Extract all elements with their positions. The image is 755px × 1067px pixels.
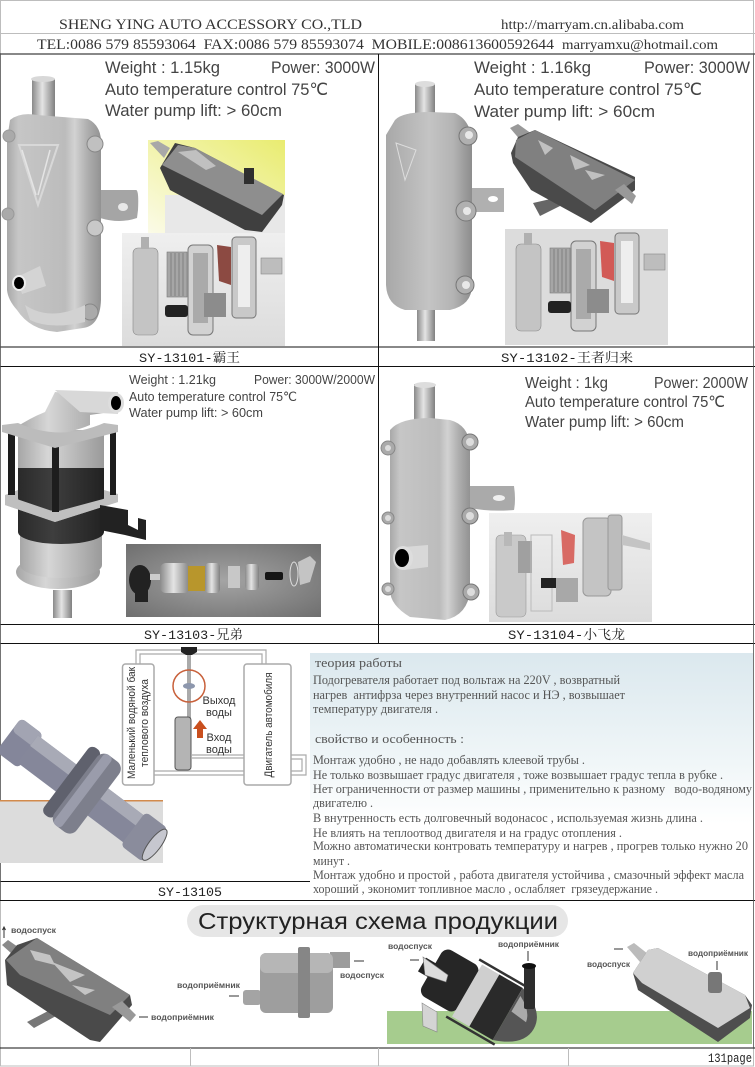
specs: SY-13101: Auto temperature control 75℃ (105, 80, 328, 99)
text block: features (313, 753, 753, 896)
tank box (122, 664, 154, 785)
text block: features: Не только возвышает градус двигателя , тоже возвышает градус тепла в рубке . (313, 768, 723, 782)
specs: SY-13103 (129, 372, 376, 420)
heater: main view (2, 76, 138, 332)
specs: SY-13104: Water pump lift: > 60cm (525, 414, 684, 431)
label and arrow: водоспуск (340, 971, 385, 980)
label and arrow (388, 942, 433, 960)
panel: SY-13104 (381, 375, 748, 622)
text block: features: Монтаж удобно и простой , работа двигателя устойчива , смазочный эффект масла (313, 868, 744, 882)
label and arrow (177, 981, 241, 996)
tank label line two: теплового воздуха (139, 678, 151, 767)
compact heater (243, 947, 350, 1018)
specs: SY-13101 (105, 58, 375, 120)
label and arrow (587, 949, 631, 969)
caption: SY-13101: SY-13101-霸王 (139, 351, 240, 366)
specs: SY-13101: Water pump lift: > 60cm (105, 101, 282, 120)
specs: SY-13104 (525, 375, 748, 431)
specs: SY-13102 (474, 58, 750, 121)
label and arrow: водоспуск (388, 942, 433, 951)
label and arrow (688, 949, 749, 970)
text block: features: хороший , экономит топливное масло , ослабляет грязеудержание . (313, 882, 658, 896)
header: company name: SHENG YING AUTO ACCESSORY CO.,TLD (59, 17, 362, 33)
photo: exploded view (489, 513, 652, 622)
silver heater (627, 943, 752, 1042)
caption: SY-13102: SY-13102-王者归来 (501, 350, 633, 366)
panel: SY-13103 (2, 372, 376, 618)
text block: features: В внутренность есть долговечный водонасос , используемая жизнь длина . (313, 811, 703, 825)
caption: SY-13105: SY-13105 (158, 885, 222, 900)
arrow (193, 720, 207, 738)
label and arrow (498, 940, 560, 961)
photo: exploded view (122, 233, 285, 346)
text block: theory (313, 673, 626, 716)
header: phone numbers: TEL:0086 579 85593064 FAX:0086 579 85593074 MOBILE:008613600592644 (37, 37, 555, 53)
text block: theory: температуру двигателя . (313, 702, 438, 716)
heading pill (187, 905, 568, 937)
specs: SY-13101: Power: 3000W (271, 58, 375, 77)
specs: SY-13103: Weight : 1.21kg (129, 372, 216, 387)
specs: SY-13104: Auto temperature control 75℃ (525, 394, 725, 411)
label and arrow: водоприёмник (498, 940, 560, 949)
caption: SY-13104: SY-13104-小飞龙 (508, 627, 625, 643)
small heater (175, 717, 191, 770)
water outlet label: воды (206, 707, 232, 719)
label and arrow: водоспуск (587, 960, 631, 969)
panel: product structure (2, 905, 752, 1058)
text block: theory: нагрев антифрза через внутренний насос и НЭ , возвышает (313, 688, 626, 702)
text block: theory: Подогревателя работает под вольтаж на 220V , возвратный (313, 673, 620, 687)
diagram: water circuit (122, 647, 306, 785)
engine label: Двигатель автомобиля (263, 672, 275, 778)
label and arrow: водоприёмник (151, 1013, 215, 1022)
water inlet label (206, 732, 232, 756)
text block: features: Нет ограниченности от размер машины , применительно к разному водо-водяному (313, 782, 753, 796)
highlight circle (173, 670, 205, 702)
water outlet label (203, 695, 236, 719)
panel: working theory text (310, 653, 753, 897)
water inlet label: Вход (207, 732, 232, 744)
heater: main view (381, 382, 515, 620)
panel: SY-13105 (0, 647, 306, 884)
pump: main view (2, 390, 146, 618)
specs: SY-13102: Water pump lift: > 60cm (474, 102, 655, 121)
header: email: marryamxu@hotmail.com (562, 38, 718, 53)
cap knob (181, 647, 197, 655)
heater: main view (386, 81, 504, 341)
specs: SY-13103: Auto temperature control 75℃ (129, 389, 297, 404)
label and arrow: водоприёмник (177, 981, 241, 990)
specs: SY-13103: Water pump lift: > 60cm (129, 405, 263, 420)
black pump (405, 936, 550, 1058)
photo: exploded view (505, 229, 668, 345)
specs: SY-13103: Power: 3000W/2000W (254, 372, 376, 387)
heading: features: свойство и особенность : (315, 732, 464, 746)
label and arrow: водоспуск (11, 926, 57, 935)
header: website: http://marryam.cn.alibaba.com (501, 18, 684, 33)
heater A (2, 938, 136, 1042)
photo: heater dark view (510, 124, 636, 223)
text block: features: минут . (313, 854, 350, 868)
specs: SY-13102: Auto temperature control 75℃ (474, 80, 702, 99)
specs: SY-13102: Weight : 1.16kg (474, 58, 591, 77)
photo: pipe heater (0, 699, 186, 884)
specs: SY-13102: Power: 3000W (644, 58, 750, 77)
panel: SY-13102 (386, 58, 750, 345)
water inlet label: воды (206, 744, 232, 756)
heading pill: Структурная схема продукции (198, 908, 558, 934)
green ground band (387, 1011, 752, 1044)
text block: features: Монтаж удобно , не надо добавлять клеевой трубы . (313, 753, 585, 767)
label and arrow (2, 926, 57, 938)
text block: features: Не влиять на теплоотвод двигателя и на градус отопления . (313, 826, 622, 840)
specs: SY-13101: Weight : 1.15kg (105, 58, 220, 77)
photo: exploded pump (126, 544, 321, 617)
label and arrow: водоприёмник (688, 949, 749, 958)
heading: theory: теория работы (315, 656, 403, 670)
photo: heater top view (148, 140, 285, 233)
label and arrow (340, 961, 385, 980)
text block: features: Можно автоматически контровать температуру и нагрев , прогрев только нужно 20 (313, 839, 748, 853)
engine box (244, 664, 291, 785)
water outlet label: Выход (203, 695, 236, 707)
caption: SY-13103: SY-13103-兄弟 (144, 628, 243, 643)
specs: SY-13104: Power: 2000W (654, 375, 748, 392)
text block: features: двигателю . (313, 796, 373, 810)
panel: SY-13101 (2, 58, 375, 346)
specs: SY-13104: Weight : 1kg (525, 375, 608, 392)
tank label: Маленький водяной бак (126, 667, 138, 779)
